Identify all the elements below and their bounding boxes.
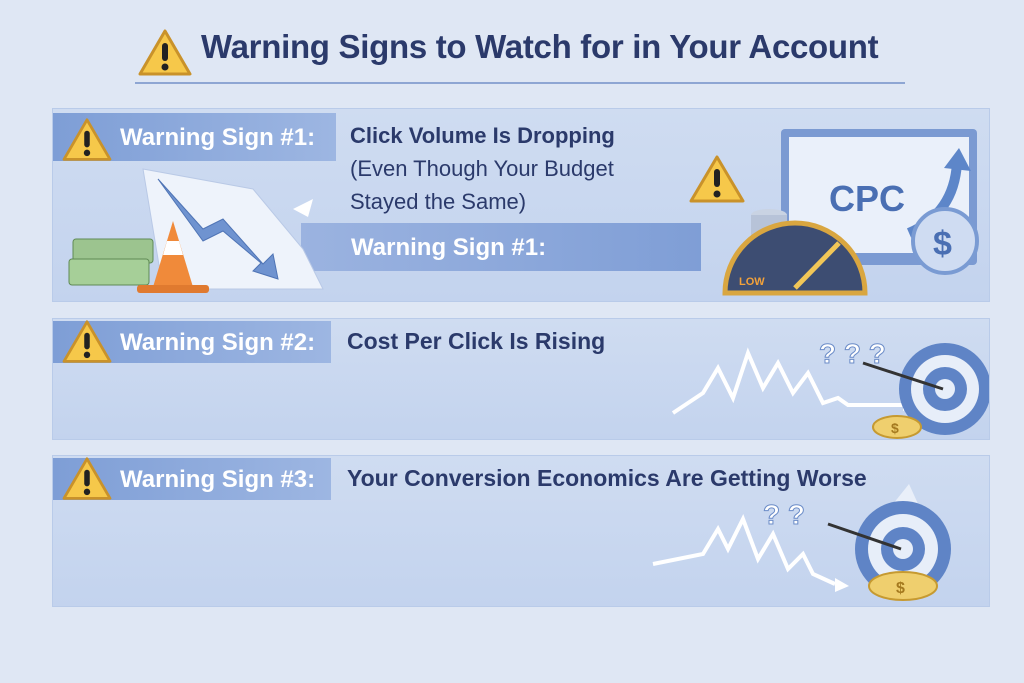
label band 1: Warning Sign #1:: [120, 124, 315, 151]
illustration: chart, target, coin: [652, 484, 951, 601]
illustration: chart and target: ? ? ?: [819, 338, 886, 369]
illustration: CPC monitor and gauge: CPC: [829, 178, 905, 219]
panel: warning sign 1: [52, 108, 990, 302]
illustration: chart and target: $: [891, 420, 899, 436]
label band 3: Warning Sign #3:: [120, 466, 315, 493]
panel: warning sign 3: [52, 455, 990, 607]
heading 3: Your Conversion Economics Are Getting Worse: [347, 465, 867, 491]
heading 1: Click Volume Is Dropping: [350, 123, 615, 148]
secondary band: [301, 223, 701, 271]
icon: warning 2: [62, 320, 112, 363]
illustration: chart, target, coin: $: [896, 580, 905, 597]
heading 1: (Even Though Your Budget: [350, 156, 614, 181]
heading 2: Cost Per Click Is Rising: [347, 328, 605, 354]
illustration: CPC monitor and gauge: LOW: [739, 276, 765, 288]
illustration: chart, target, coin: ? ?: [763, 499, 805, 530]
icon: warning 3: [62, 457, 112, 500]
illustration: CPC monitor and gauge: [690, 129, 979, 296]
title: Warning Signs to Watch for in Your Account: [201, 28, 878, 65]
label band 2: [53, 321, 331, 363]
illustration: chart and target: [672, 338, 989, 439]
icon: warning 1: [62, 118, 112, 161]
title: [135, 28, 905, 84]
secondary band: Warning Sign #1:: [351, 234, 546, 261]
illustration: CPC monitor and gauge: $: [933, 225, 952, 263]
label band 2: Warning Sign #2:: [120, 329, 315, 356]
icon: title warning: [138, 29, 192, 76]
heading 1: Stayed the Same): [350, 189, 526, 214]
illustration: falling chart, money, cone: [68, 168, 324, 293]
panel: warning sign 2: [52, 318, 990, 440]
heading 1: [350, 123, 615, 214]
label band 3: [53, 458, 331, 500]
label band 1: [53, 113, 336, 161]
